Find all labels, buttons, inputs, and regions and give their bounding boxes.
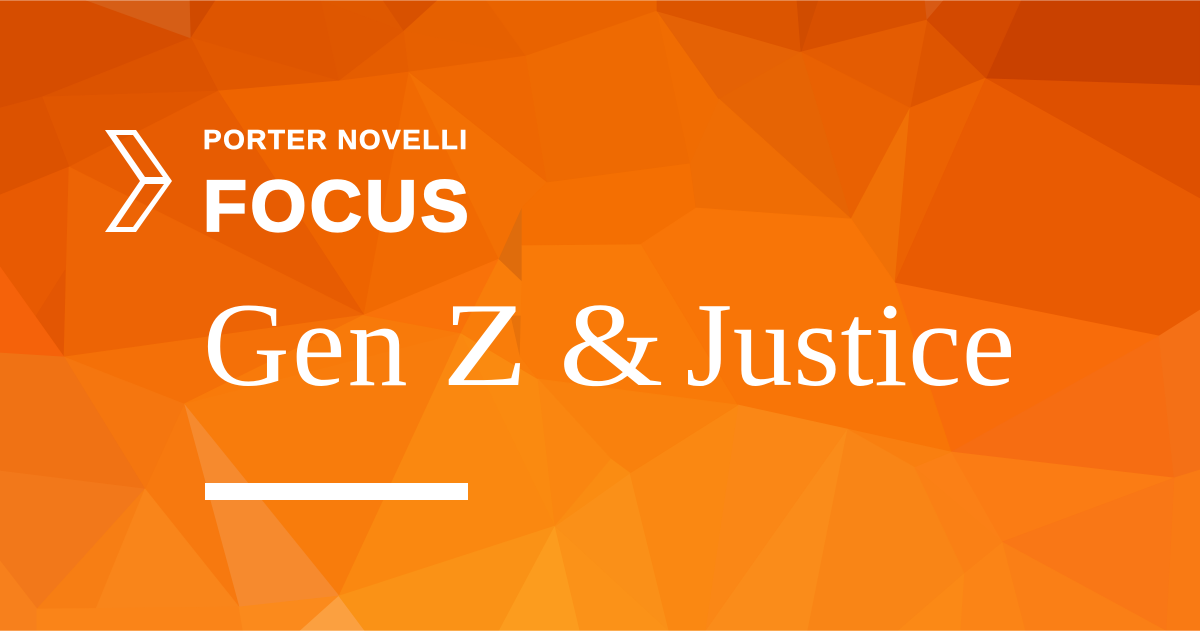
title: Gen [203,278,410,411]
divider bar [205,483,468,500]
title [203,278,1016,411]
title: & [559,278,666,411]
title: Z [442,278,531,411]
title: Justice [686,278,1016,411]
brand name: PORTER NOVELLI [203,124,468,155]
focus heading: FOCUS [203,167,472,247]
